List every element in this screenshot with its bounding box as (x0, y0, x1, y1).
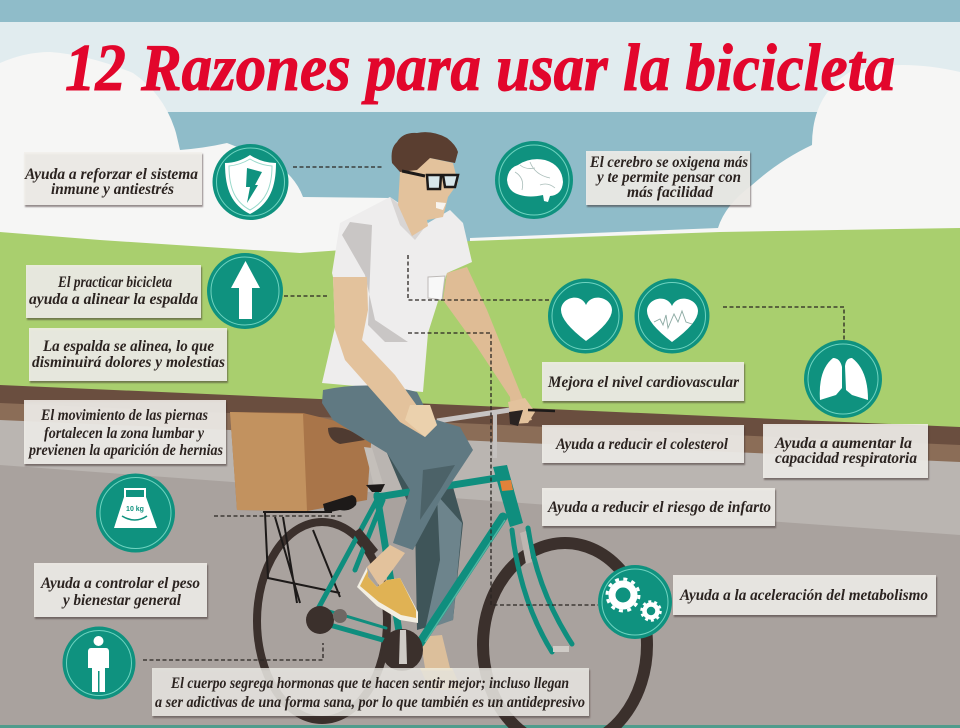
stem and handlebar (493, 412, 497, 458)
callout: weight control (34, 563, 207, 617)
skin right arm (443, 267, 532, 424)
hair (392, 132, 458, 172)
callout: hormones: a ser adictivas de una forma sana, por lo que también es un antidepresivo (155, 694, 585, 711)
back leg (387, 440, 463, 630)
glasses (402, 171, 458, 189)
icon: weight: 10 kg (126, 506, 144, 513)
callout: cardiovascular: Mejora el nivel cardiovascular (547, 374, 740, 391)
callout: less pain: La espalda se alinea, lo que (42, 338, 214, 355)
bicycle frame (312, 478, 572, 652)
icon: heart (548, 278, 623, 354)
connector lines (143, 167, 844, 660)
rear rack (263, 512, 340, 603)
left cloud (0, 52, 400, 260)
callout: less pain (29, 328, 227, 381)
ankle (367, 545, 405, 587)
callout: lumbar: previenen la aparición de hernias (27, 442, 223, 459)
head tube (493, 465, 523, 527)
icon: up arrow (207, 253, 283, 329)
callout: metabolism: Ayuda a la aceleración del metabolismo (679, 587, 928, 604)
pants front leg (322, 385, 473, 550)
road (0, 385, 960, 728)
shirt (322, 197, 472, 392)
callout: brain: más facilidad (627, 184, 713, 201)
callout: brain (586, 151, 750, 205)
callout: lung capacity: Ayuda a aumentar la (774, 435, 912, 452)
callout: lung capacity (763, 424, 928, 478)
icon: lungs (804, 340, 882, 418)
title: 12 Razones para usar la bicicleta (65, 31, 895, 105)
icon: gears (598, 565, 672, 639)
callout: hormones (152, 668, 589, 716)
callout: lumbar (24, 400, 226, 464)
left arm (333, 277, 437, 437)
callout: heart attack (542, 488, 775, 526)
callout: metabolism (673, 575, 936, 615)
rear wheel (257, 522, 387, 720)
shoe (357, 567, 418, 623)
callout: cholesterol: Ayuda a reducir el colesterol (555, 436, 729, 453)
callout: weight control: Ayuda a controlar el peso (40, 575, 200, 592)
illustration: cyclist with bicycle (230, 132, 647, 728)
neck and face (398, 158, 458, 236)
mudguard segment (353, 528, 378, 558)
callout: immune system: inmune y antiestrés (51, 181, 174, 198)
callout: heart attack: Ayuda a reducir el riesgo de infarto (547, 499, 771, 516)
callout: hormones: El cuerpo segrega hormonas que te hacen sentir mejor; incluso llegan (170, 675, 569, 692)
rear light (323, 495, 356, 513)
right hand and grip (508, 398, 535, 424)
callout: cholesterol (542, 425, 744, 463)
saddle and post (328, 427, 365, 444)
callout: brain: y te permite pensar con (595, 169, 741, 186)
crank and derailleur (381, 629, 423, 671)
front hub (553, 646, 569, 652)
callout: lumbar: fortalecen la zona lumbar y (44, 425, 204, 442)
icon: shield (212, 144, 288, 220)
callout: immune system (24, 152, 202, 205)
icon: heart with pulse (634, 278, 710, 354)
callout: lumbar: El movimiento de las piernas (40, 407, 208, 424)
callout: lung capacity: capacidad respiratoria (775, 450, 917, 467)
cardboard box (230, 412, 372, 511)
callout: brain: El cerebro se oxigena más (589, 154, 748, 171)
callout: weight control: y bienestar general (61, 592, 182, 609)
callout: immune system: Ayuda a reforzar el sistema (24, 166, 198, 183)
front brake (520, 531, 532, 564)
callout: back alignment: El practicar bicicleta (57, 274, 172, 291)
icon: person (62, 626, 136, 700)
icon: weight (96, 474, 175, 552)
green field (0, 228, 960, 430)
front wheel (483, 543, 647, 728)
callout: less pain: disminuirá dolores y molestias (32, 354, 225, 371)
left hand (405, 405, 437, 437)
callout: cardiovascular (542, 362, 744, 401)
callout: back alignment (26, 265, 201, 318)
right cloud (470, 65, 960, 250)
back ankle and shoe (420, 635, 462, 690)
icon: brain (495, 141, 573, 219)
callout: back alignment: ayuda a alinear la espalda (29, 291, 198, 308)
down tube highlight (425, 520, 505, 642)
